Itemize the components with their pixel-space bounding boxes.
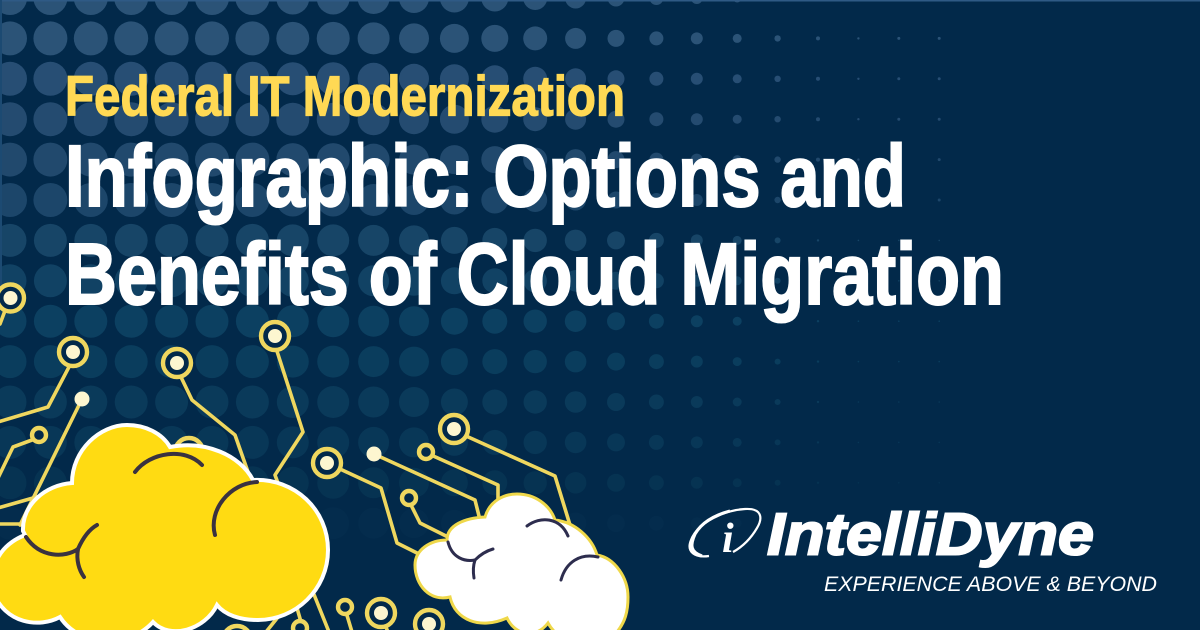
eyebrow heading: Federal IT Modernization bbox=[65, 64, 625, 128]
logo bbox=[690, 502, 1157, 596]
circuit traces, white cloud bbox=[340, 436, 570, 555]
left edge line bbox=[0, 0, 2, 300]
logo emblem bbox=[690, 509, 760, 562]
logo wordmark: IntelliDyne bbox=[767, 502, 1094, 568]
logo tagline: EXPERIENCE ABOVE & BEYOND bbox=[824, 573, 1157, 596]
logo emblem: i bbox=[722, 516, 734, 562]
white cloud bbox=[415, 494, 628, 630]
circuit nodes bbox=[0, 284, 468, 630]
halftone dot pattern bbox=[0, 0, 941, 540]
circuit traces, yellow cloud bbox=[0, 300, 388, 630]
main title bbox=[65, 128, 1004, 323]
main title: Benefits of Cloud Migration bbox=[65, 226, 1004, 323]
top edge line bbox=[0, 0, 1200, 2]
main title: Infographic: Options and bbox=[65, 128, 906, 225]
yellow cloud bbox=[0, 425, 328, 630]
